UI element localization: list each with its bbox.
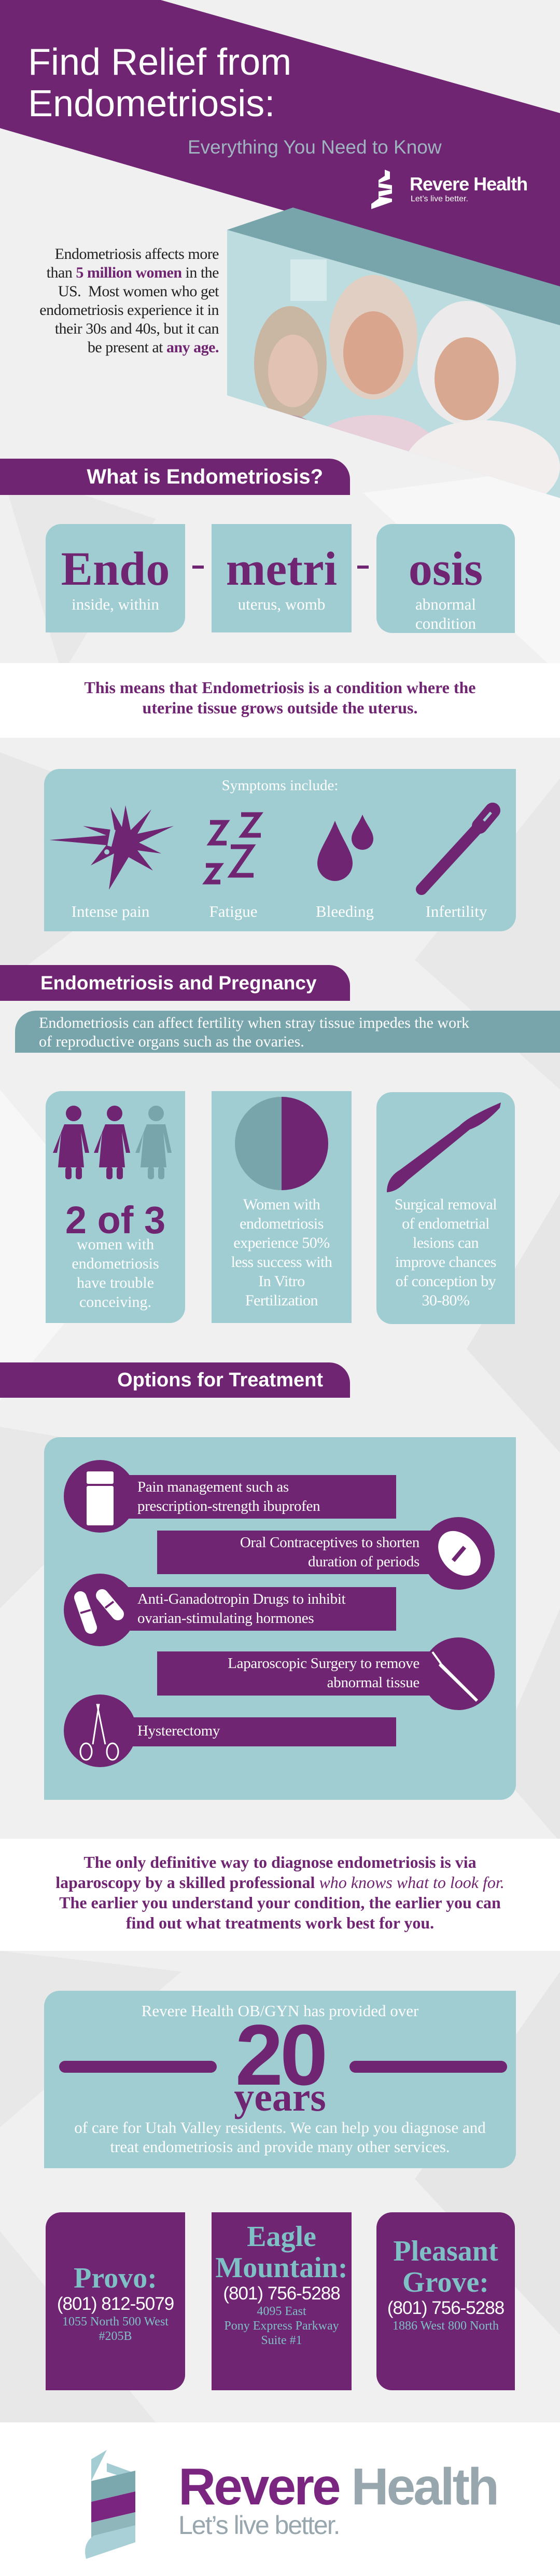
panel: IVF: Fertilization [245, 1292, 318, 1309]
subtitle: Everything You Need to Know [188, 136, 442, 158]
panel: 2 of 3 [46, 1091, 185, 1323]
word: osis: condition [415, 614, 476, 632]
icon: infertility [422, 810, 493, 889]
panel: treatment options [44, 1437, 516, 1800]
header banner [0, 0, 560, 498]
symptom labels: Intense pain [72, 902, 149, 920]
word: osis: abnormal [415, 595, 476, 613]
fertility band [15, 1011, 560, 1053]
icon: pain [49, 805, 174, 890]
location: Provo: (801) 812-5079 [57, 2294, 174, 2314]
intro text: endometriosis experience it in [39, 301, 219, 319]
location: Provo: 1055 North 500 West [62, 2315, 169, 2329]
panel: IVF: In Vitro [258, 1273, 305, 1290]
location: Eagle Mountain: Pony Express Parkway [224, 2319, 339, 2333]
word: metri: uterus, womb [238, 595, 325, 613]
intro text: their 30s and 40s, but it can [55, 320, 219, 337]
panel: IVF: Women with [243, 1196, 320, 1213]
word: Endo: inside, within [72, 595, 159, 613]
logo: footer [85, 2450, 497, 2559]
panel: surgery: improve chances [395, 1253, 496, 1271]
title: Find Relief from [28, 42, 291, 83]
panel: symptoms [44, 769, 516, 931]
logo: header [371, 170, 527, 209]
location: Pleasant Grove: (801) 756-5288 [387, 2298, 504, 2318]
option 2: Oral Contraceptives to shorten [240, 1534, 419, 1551]
intro text: US. Most women who get [58, 283, 219, 300]
location: Eagle Mountain: Mountain: [215, 2252, 348, 2284]
panel: surgery: of conception by [396, 1273, 496, 1290]
icon: scalpel [387, 1103, 501, 1192]
photo [227, 230, 560, 498]
option 4: abnormal tissue [327, 1674, 419, 1691]
heading: Endometriosis and Pregnancy [0, 965, 350, 1001]
heading: What is Endometriosis: What is Endometriosis? [87, 465, 323, 488]
panel: 2 of 3: conceiving. [79, 1293, 151, 1311]
icon: fatigue [206, 815, 261, 882]
stat: years: years [234, 2074, 326, 2119]
definition text: uterine tissue grows outside the uterus. [143, 698, 417, 717]
option 5 [64, 1695, 396, 1767]
panel: surgery: Surgical removal [395, 1196, 497, 1213]
option 3: Anti-Ganadotropin Drugs to inhibit [137, 1591, 345, 1607]
option 4: Laparoscopic Surgery to remove [228, 1655, 419, 1672]
word: metri: metri [226, 542, 337, 595]
panel: 20 years [44, 1991, 516, 2168]
panel: 20 years: Revere Health OB/GYN has provided over [142, 2002, 418, 2020]
panel: IVF: endometriosis [240, 1215, 324, 1232]
panel: surgery: lesions can [413, 1234, 479, 1251]
location: Provo [46, 2212, 185, 2390]
panel: IVF: less success with [231, 1253, 332, 1271]
option 2: duration of periods [308, 1553, 419, 1570]
panel: surgery [376, 1092, 515, 1324]
intro text: be present at any age. [88, 339, 219, 356]
panel: IVF [212, 1091, 352, 1323]
word: Endo [46, 524, 185, 632]
option 5: Hysterectomy [137, 1723, 220, 1739]
icon: bleeding [317, 815, 373, 881]
panel: symptoms: Infertility [426, 902, 487, 920]
option 3: ovarian-stimulating hormones [137, 1610, 314, 1627]
panel: symptoms: Bleeding [316, 902, 374, 920]
intro text [39, 245, 219, 356]
heading: Options for Treatment [0, 1362, 350, 1398]
definition text: This means that Endometriosis is a condition where the [84, 678, 476, 697]
icon: women [53, 1106, 172, 1179]
panel: word parts [46, 524, 515, 633]
option 1: Pain management such as [137, 1479, 289, 1495]
diagnosis text: find out what treatments work best for you. [126, 1913, 434, 1932]
panel: 20 years: treat endometriosis and provide many other services. [110, 2138, 450, 2156]
panel: 2 of 3: have trouble [77, 1274, 154, 1291]
intro text: Endometriosis affects more [55, 245, 219, 263]
diagnosis text: laparoscopy by a skilled professional who knows what to look for. [55, 1873, 505, 1892]
panel: surgery: of endometrial [402, 1215, 489, 1232]
option 4 [157, 1637, 495, 1710]
word: metri [212, 524, 352, 632]
word: osis: osis [409, 542, 483, 595]
logo: header: Revere Health [410, 173, 527, 195]
word: osis [376, 524, 515, 633]
location: Provo: #205B [99, 2330, 132, 2343]
icon: logo mark [85, 2450, 135, 2559]
dash [192, 566, 204, 569]
fertility band: Endometriosis can affect fertility when stray tissue impedes the work [39, 1014, 469, 1031]
location: Eagle Mountain: Eagle [247, 2221, 316, 2253]
location: Eagle Mountain: (801) 756-5288 [223, 2283, 340, 2304]
option 1 [64, 1460, 396, 1533]
stat: 2 of 3: 2 of 3 [65, 1199, 165, 1242]
divider lines [59, 2061, 217, 2073]
diagnosis text: The only definitive way to diagnose endometriosis is via [83, 1853, 477, 1871]
dash [357, 566, 369, 569]
location: Eagle Mountain: Suite #1 [261, 2334, 302, 2347]
intro text: than 5 million women in the [47, 264, 219, 281]
stat: 20: 20 [235, 2007, 325, 2103]
panel: 2 of 3: women with [77, 1236, 154, 1253]
definition text [84, 678, 476, 717]
heading: What is Endometriosis [0, 459, 350, 495]
diagnosis text [55, 1853, 505, 1932]
location: Provo: Provo: [74, 2262, 157, 2294]
title: Endometriosis: [28, 83, 275, 125]
panel: surgery: 30-80% [422, 1292, 469, 1309]
heading: Options for Treatment: Options for Treatment [117, 1369, 323, 1391]
panel: IVF: experience 50% [233, 1234, 330, 1251]
option 2 [157, 1517, 495, 1590]
diagnosis text: The earlier you understand your condition, the earlier you can [59, 1893, 501, 1912]
panel: symptoms: Fatigue [209, 902, 257, 920]
logo: header: Let’s live better. [411, 195, 468, 203]
logo: footer: Revere Health [178, 2458, 497, 2516]
word: Endo: Endo [61, 542, 170, 595]
location: Pleasant Grove: Grove: [402, 2266, 489, 2298]
chart: pie [235, 1097, 328, 1190]
title [28, 42, 291, 125]
heading: Endometriosis and Pregnancy: Endometriosis and Pregnancy [40, 972, 317, 994]
panel: 20 years: of care for Utah Valley residents. We can help you diagnose and [74, 2118, 486, 2137]
panel: 2 of 3: endometriosis [72, 1255, 159, 1272]
fertility band: of reproductive organs such as the ovaries. [39, 1033, 304, 1050]
location: Eagle Mountain [212, 2212, 352, 2390]
option 3 [64, 1574, 396, 1646]
logo: footer: Let’s live better. [178, 2511, 340, 2540]
location: Pleasant Grove [376, 2212, 515, 2390]
location: Eagle Mountain: 4095 East [257, 2305, 306, 2318]
location: Pleasant Grove: 1886 West 800 North [393, 2319, 499, 2333]
symptoms heading: Symptoms include: [222, 777, 338, 794]
option 1: prescription-strength ibuprofen [137, 1498, 320, 1514]
location: Pleasant Grove: Pleasant [393, 2235, 498, 2267]
